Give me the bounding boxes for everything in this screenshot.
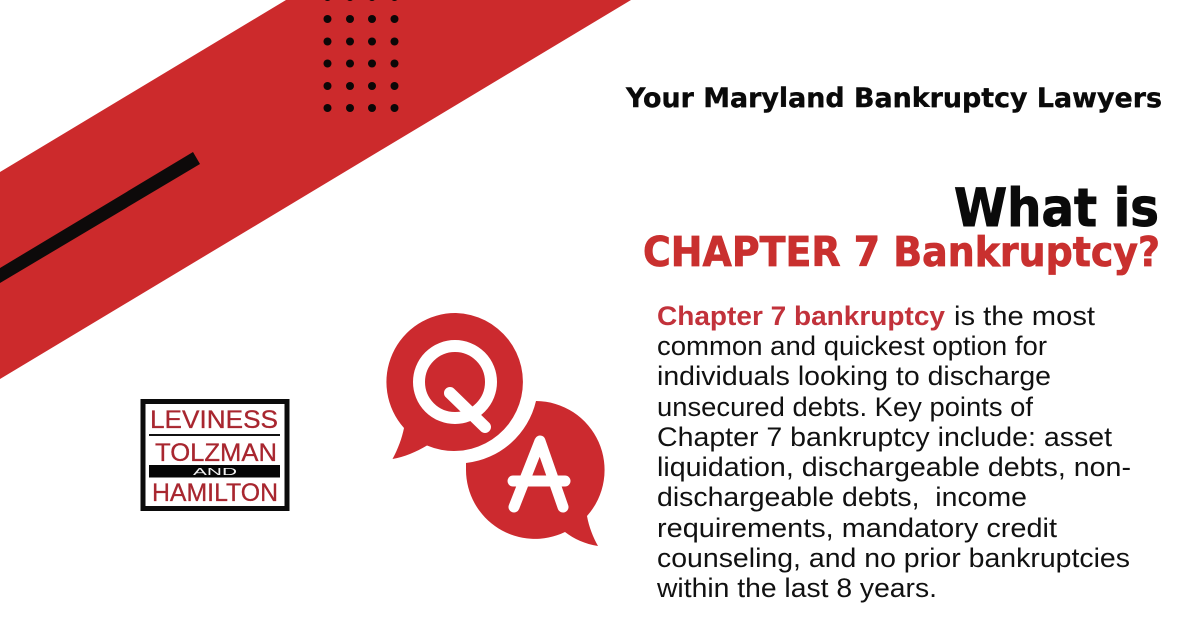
diagonal red band [0,0,631,379]
logo name: Tolzman: TOLZMAN [155,439,277,467]
body paragraph: common and quickest option for [657,331,1047,361]
body paragraph: unsecured debts. Key points of [657,392,1033,422]
logo name: And: AND [193,466,238,478]
body paragraph [656,301,1131,603]
logo name: Leviness: LEVINESS [150,406,278,434]
body paragraph: Chapter 7 bankruptcy [657,301,945,331]
body paragraph: dischargeable debts, income [657,482,1027,512]
title: Chapter 7 Bankruptcy: CHAPTER 7 Bankruptcy? [643,228,1160,276]
logo name: Hamilton: HAMILTON [152,479,278,507]
black diagonal bar [0,152,200,283]
body paragraph: Chapter 7 bankruptcy include: asset [657,422,1113,452]
body paragraph: individuals looking to discharge [657,361,1051,391]
law firm logo [143,402,287,508]
icon: A bubble [466,401,605,546]
body paragraph: liquidation, dischargeable debts, non- [657,452,1131,482]
body paragraph: within the last 8 years. [656,573,937,603]
dot grid [324,0,398,112]
icon: Q bubble [386,313,523,459]
body paragraph: counseling, and no prior bankruptcies [657,543,1130,573]
icon: Q and A speech bubbles [386,313,605,546]
title: What is: What is [954,178,1159,239]
body paragraph: requirements, mandatory credit [657,513,1058,543]
tagline heading: Your Maryland Bankruptcy Lawyers [625,83,1162,114]
body paragraph: is the most [954,301,1096,331]
